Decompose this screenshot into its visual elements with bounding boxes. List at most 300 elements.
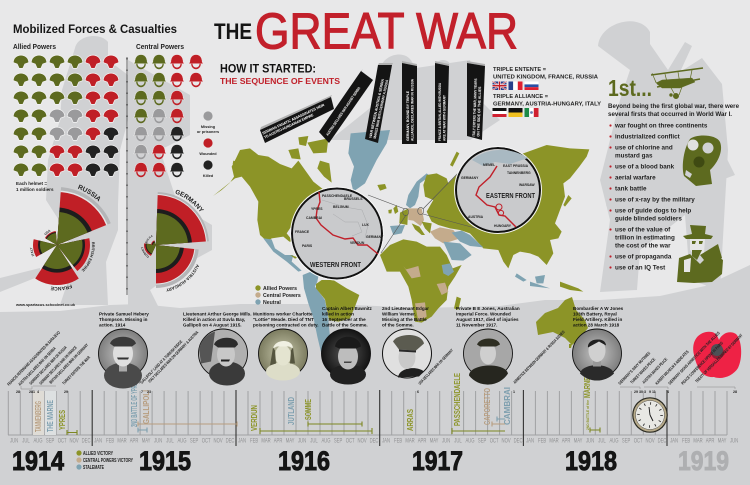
date ticks: 29	[64, 390, 68, 394]
arabia	[443, 242, 472, 261]
central powers helmets	[134, 44, 203, 177]
battles 1918	[583, 377, 600, 432]
firsts intro: Beyond being the first global war, there were	[608, 103, 739, 110]
portrait caption 4: killed in action	[322, 312, 354, 316]
australia	[536, 297, 588, 348]
portrait caption 6	[456, 306, 520, 328]
flag: italy	[524, 108, 538, 117]
battles 1916: JUTLAND	[287, 397, 296, 425]
month labels: AUG	[321, 438, 331, 445]
month labels: APR	[130, 438, 139, 445]
firsts list: war fought on three continents	[614, 122, 708, 130]
firsts list: use of a blood bank	[615, 164, 675, 170]
portrait 1	[98, 329, 148, 388]
central casualties rose chart: AUSTRIA-HUNGARY	[166, 264, 199, 292]
portrait 5	[382, 329, 432, 378]
casualty legend: or prisoners	[197, 130, 219, 134]
month labels: JUN	[154, 438, 162, 445]
flag: germany	[492, 108, 506, 117]
month labels: MAY	[142, 438, 151, 445]
portrait caption 5	[382, 306, 429, 328]
battles 1917: CAPORETTO	[483, 388, 492, 425]
portrait caption 5: 2nd Lieutenant Edgar	[382, 306, 429, 311]
timeline legend: ALLIED VICTORY	[83, 451, 113, 457]
events 1918: KAISER WILHELM II ABDICATES	[654, 349, 690, 386]
casualty legend: Missing	[201, 125, 216, 129]
month labels: JUL	[22, 438, 30, 445]
central powers europe	[408, 208, 424, 226]
western front inset: LUX	[362, 223, 370, 227]
month labels: SEP	[190, 438, 199, 445]
date ticks: 1	[513, 390, 515, 394]
icon: biplane	[651, 68, 703, 99]
eastern front inset: MEMEL	[483, 163, 495, 167]
eastern front inset: TANNENBERG	[507, 171, 531, 175]
month labels: MAY	[286, 438, 295, 445]
helmet scale note: 1 million soldiers	[16, 187, 54, 192]
month labels: OCT	[490, 438, 499, 445]
western front inset: YPRES	[311, 207, 323, 211]
domino: austria declares war: AUSTRIA DECLARES WAR AGAINST SERBIA	[326, 86, 361, 137]
triple entente and alliance	[492, 67, 601, 117]
month labels: JUN	[586, 438, 594, 445]
battles 1914: THE MARNE	[46, 400, 55, 432]
battles 1917: PASSCHENDAELE	[453, 373, 462, 426]
events 1919 over poppy: PEACE CONFERENCE OPENS IN PARIS	[680, 340, 724, 386]
events 1914	[6, 330, 91, 387]
firsts list: guide blinded soldiers	[615, 216, 682, 222]
month labels: NOV	[214, 438, 223, 445]
persia	[452, 231, 483, 247]
portrait caption 3: "Lottie" Meade. Died of TNT	[253, 317, 314, 322]
timeline legend: CENTRAL POWERS VICTORY	[83, 458, 133, 464]
month labels: AUG	[33, 438, 43, 445]
month labels: NOV	[358, 438, 367, 445]
western front inset: WESTERN FRONT	[310, 262, 362, 269]
ottoman empire	[430, 227, 460, 243]
month labels: JUL	[166, 438, 174, 445]
novaya zemlya	[450, 152, 459, 167]
date ticks: 29	[634, 390, 638, 394]
russia and asia	[423, 145, 589, 268]
month labels: JUN	[730, 438, 738, 445]
month labels: DEC	[82, 438, 91, 445]
month labels: DEC	[658, 438, 667, 445]
month labels: DEC	[226, 438, 235, 445]
flag: france	[508, 82, 522, 90]
portrait caption 4: 16 September at the	[322, 317, 366, 322]
month labels: SEP	[334, 438, 343, 445]
title: GREAT WAR	[255, 2, 518, 60]
japan	[563, 195, 572, 207]
month labels: JAN	[670, 438, 678, 445]
source url: www.spartacus.schoolnet.co.uk	[15, 302, 76, 307]
month labels: APR	[706, 438, 715, 445]
allied casualties rose chart: BRITISH EMPIRE	[82, 242, 95, 272]
year divider lines	[92, 390, 667, 446]
icon: pocket watch	[632, 397, 668, 433]
triple entente and alliance: UNITED KINGDOM, FRANCE, RUSSIA	[493, 74, 598, 80]
month labels: JAN	[94, 438, 102, 445]
month labels: JUL	[598, 438, 606, 445]
firsts list: aerial warfare	[615, 174, 656, 182]
ground band behind timeline	[0, 265, 750, 485]
central casualties rose chart: BULGARIA	[145, 235, 153, 244]
domino: italy: ITALY ENTERS THE WAR, MANY YEARS	[472, 78, 478, 137]
month labels: MAR	[261, 438, 271, 445]
date ticks: 30	[639, 390, 643, 394]
portrait 7	[572, 329, 622, 381]
western front inset	[290, 187, 384, 280]
greenland	[348, 130, 390, 192]
indonesia	[515, 273, 550, 288]
month labels: SEP	[46, 438, 55, 445]
portrait caption 7: Field Artillery. Killed in	[573, 317, 622, 322]
date ticks: 23	[147, 390, 151, 394]
battles 1916: SOMME	[304, 399, 313, 420]
events 1914: GERMANY DECLARES WAR ON FRANCE	[38, 345, 78, 386]
firsts list: the cost of the war	[615, 242, 671, 250]
battles 1918: 2ND BATTLE of the	[585, 399, 590, 430]
month labels: APR	[418, 438, 427, 445]
month labels: OCT	[202, 438, 211, 445]
domino: assassination	[260, 95, 334, 143]
battles 1915: GALLIPOLI	[142, 390, 151, 424]
portrait caption 6: 11 November 1917.	[456, 322, 497, 328]
firsts intro: several firsts that occurred in World War I.	[608, 111, 732, 118]
portrait caption 6: Imperial Force. Wounded	[456, 312, 511, 316]
eastern front inset: EAST PRUSSIA	[503, 164, 529, 168]
allied powers helmets	[13, 44, 119, 176]
events 1914: AUSTRIA DECLARES WAR ON SERBIA	[17, 346, 57, 387]
western front inset: GERMANY	[366, 235, 384, 239]
portrait caption 6: August 1917, died of injuries	[456, 317, 519, 322]
battles 1917: CAMBRAI	[503, 387, 512, 425]
events 1918	[512, 329, 690, 386]
western front inset: BELGIUM	[333, 205, 349, 209]
portrait caption 5: William Vermer.	[382, 312, 416, 316]
portrait caption 1	[99, 312, 149, 328]
month labels: JUL	[310, 438, 318, 445]
firsts list: use of the value of	[615, 226, 671, 234]
italy and balkans	[412, 222, 432, 235]
month labels: AUG	[609, 438, 619, 445]
month labels: MAR	[117, 438, 127, 445]
portrait 4	[322, 329, 370, 384]
world map	[213, 130, 589, 357]
africa central powers colonies	[403, 266, 448, 322]
africa	[380, 239, 462, 323]
domino: france and britain	[435, 61, 449, 143]
firsts list: industrialized conflict	[615, 134, 681, 140]
events 1915: "GALLIPOLI" LAND AT A TURKISH RIDGE	[138, 339, 184, 386]
month labels: MAR	[693, 438, 703, 445]
central casualties rose chart: GERMANY	[176, 190, 204, 212]
month labels: MAR	[549, 438, 559, 445]
portrait 2	[198, 329, 248, 386]
iceland	[377, 184, 387, 191]
date ticks: 28	[16, 390, 20, 394]
domino: assassination: SERBIAN FANATIC ASSASSINATES HEIR	[262, 103, 325, 136]
date ticks: 28	[29, 390, 33, 394]
month labels: FEB	[394, 438, 403, 445]
month labels: MAY	[574, 438, 583, 445]
firsts list: tank battle	[615, 186, 647, 192]
portrait caption 7: action 28 March 1918	[573, 322, 620, 328]
events 1914: TURKEY ENTERS THE WAR	[61, 355, 91, 386]
triple entente and alliance: GERMANY, AUSTRIA-HUNGARY, ITALY	[493, 102, 601, 108]
month labels: APR	[562, 438, 571, 445]
domino: france and britain: ARE AT WAR WITH GERMANY	[442, 95, 446, 141]
firsts list: use of chlorine and	[615, 144, 673, 152]
month labels: FEB	[250, 438, 259, 445]
new guinea	[560, 282, 583, 292]
portrait caption 2: Killed in action at Suvla Bay,	[183, 317, 245, 322]
portrait caption 5: of the Somme.	[382, 322, 414, 328]
month labels: NOV	[502, 438, 511, 445]
eastern front inset: AUSTRIA	[468, 215, 484, 219]
portrait caption 7: 103th Battery, Royal	[573, 312, 617, 316]
events 1915: ITALY DECLARES WAR ON GERMANY & AUSTRIA	[147, 330, 199, 384]
brazil	[316, 280, 359, 322]
portrait caption 4: Captain Albert Bawnitz	[322, 306, 373, 311]
western front inset: BRUSSELS	[344, 197, 363, 201]
scandinavia	[406, 173, 430, 208]
map legend: Central Powers	[263, 293, 301, 299]
sequence of events heading: THE SEQUENCE OF EVENTS	[220, 77, 341, 86]
south america neutral	[303, 271, 330, 357]
battles 1917	[406, 373, 512, 434]
eastern front inset	[454, 146, 542, 234]
domino: germany declares war	[402, 61, 417, 144]
month labels: JUN	[298, 438, 306, 445]
map legend: Neutral	[263, 300, 281, 306]
month labels	[10, 438, 738, 445]
portrait caption 7	[573, 306, 624, 328]
events 1914: GERMANY DECLARES WAR ON RUSSIA	[28, 345, 68, 386]
events 1918: ARMISTICE BETWEEN GERMANY & RUSSIA SIGNED	[512, 329, 566, 385]
month labels: MAY	[430, 438, 439, 445]
events 1918: AUSTRIA MAKES PEACE	[641, 357, 668, 385]
date ticks: 4	[37, 390, 39, 394]
month labels: JAN	[382, 438, 390, 445]
timeline legend	[76, 450, 133, 471]
domino: russia mobilises	[365, 63, 393, 143]
domino: germany declares war: GERMANY, BOUND BY TRIPLE	[406, 91, 410, 141]
portrait caption 5: Missing at the Battle	[382, 317, 427, 322]
portrait caption 2: Lieutenant Arthur George Mills.	[183, 312, 252, 316]
month labels: JUL	[454, 438, 462, 445]
firsts list	[609, 122, 708, 272]
firsts heading: 1st...	[608, 75, 652, 101]
date ticks: 6	[417, 390, 419, 394]
year labels: 1916	[278, 446, 330, 476]
icon: poppy	[693, 332, 741, 378]
portrait caption 2: Gallipoli on 4 August 1915.	[183, 322, 242, 328]
portrait caption 2	[183, 312, 252, 328]
western europe	[388, 205, 408, 225]
month labels: OCT	[346, 438, 355, 445]
portrait caption 4: Battle of the Somme.	[322, 322, 368, 328]
flag: uk	[492, 82, 506, 90]
firsts list: use of guide dogs to help	[615, 208, 691, 214]
domino: assassination: TO AUSTRO-HUNGARIAN EMPIRE	[264, 113, 315, 139]
allied casualties rose chart	[30, 184, 110, 290]
portrait caption 6: Private B E Jones, Australian	[456, 306, 520, 311]
casualty legend	[197, 111, 219, 178]
date ticks: 9	[649, 390, 651, 394]
domino: germany declares war: ALLIANCE, DECLARES WAR IN RUSSIA	[410, 79, 414, 141]
date ticks: 28	[733, 390, 737, 394]
month labels: NOV	[70, 438, 79, 445]
month labels: OCT	[58, 438, 67, 445]
year labels: 1918	[565, 446, 617, 476]
portrait caption 3	[253, 312, 319, 328]
battles 1918: MARNE	[583, 377, 592, 398]
timeline legend: STALEMATE	[83, 465, 104, 471]
triple entente and alliance: TRIPLE ALLIANCE =	[493, 94, 549, 100]
map legend	[255, 285, 301, 306]
portrait caption 4	[322, 306, 373, 328]
battles 1916: VERDUN	[250, 405, 259, 431]
battles 1914: TANNENBERG	[34, 401, 43, 432]
firsts list: trillion in estimating	[615, 234, 675, 242]
allied powers helmets: Allied Powers	[13, 44, 56, 51]
year labels: 1915	[139, 446, 191, 476]
portrait caption 1: Thompson. Missing in	[99, 317, 148, 322]
sequence of events heading	[220, 64, 341, 86]
firsts list: use of an IQ Test	[615, 264, 666, 272]
arctic islands	[233, 136, 332, 183]
domino: france and britain: FRANCE & BRITAIN, ALLIED WITH RUSSIA	[438, 83, 442, 141]
flag: austria-hungary	[508, 108, 522, 117]
domino: russia mobilises: MAKES WAR WITH GERMANY A RUSSIA	[373, 79, 389, 139]
north america	[213, 148, 324, 242]
events 1919 over poppy: GERMANY SIGNS ARMISTICE WITH THE ALLIES	[667, 330, 721, 386]
month labels: FEB	[538, 438, 547, 445]
madagascar	[454, 297, 461, 310]
firsts list: use of x-ray by the military	[615, 196, 695, 204]
triple entente and alliance: TRIPLE ENTENTE =	[493, 67, 547, 73]
portrait 6	[464, 329, 512, 385]
portrait 3	[258, 329, 308, 380]
battles 1914	[33, 391, 77, 435]
western front inset: CAMBRAI	[306, 216, 322, 220]
year labels: 1917	[412, 446, 463, 476]
month labels: FEB	[682, 438, 691, 445]
battles 1917: ARRAS	[406, 408, 415, 431]
battles 1915	[130, 380, 237, 432]
central powers helmets: Central Powers	[136, 44, 184, 51]
firsts list: use of propaganda	[615, 254, 672, 260]
date ticks: 1	[33, 390, 35, 394]
central casualties rose chart	[141, 190, 209, 292]
western front inset: VERDUN	[350, 241, 365, 245]
month labels: AUG	[177, 438, 187, 445]
mexico and central america	[263, 238, 302, 272]
eastern front inset: HUNGARY	[494, 224, 512, 228]
battles 1915: 2ND BATTLE OF YPRES	[130, 380, 139, 427]
allied casualties rose chart: FRANCE	[50, 284, 72, 290]
background soldier silhouettes	[0, 21, 735, 310]
eastern front inset: EASTERN FRONT	[486, 193, 536, 200]
timeline gridlines	[8, 391, 727, 435]
icon: uncle sam	[677, 225, 723, 283]
connector lines to front maps	[368, 171, 475, 253]
portrait caption 1: Private Samuel Hebery	[99, 312, 149, 316]
section heading: mobilized forces: Mobilized Forces & Casualties	[13, 22, 177, 36]
date ticks: 4	[667, 390, 669, 394]
central casualties rose chart: TURKEY	[141, 247, 149, 258]
month labels: APR	[274, 438, 283, 445]
iberia	[390, 225, 405, 235]
helmet scale note: Each helmet =	[16, 181, 47, 186]
month labels: JAN	[238, 438, 246, 445]
month labels: JAN	[526, 438, 534, 445]
firsts intro	[608, 103, 739, 118]
eastern front inset: GERMANY	[461, 176, 479, 180]
events 1918: TURKEY MAKES PEACE	[629, 357, 656, 385]
year labels: 1919	[678, 446, 729, 476]
flag: russia	[524, 82, 538, 90]
casualty legend: Killed	[203, 174, 214, 178]
icon: gas mask	[683, 136, 721, 186]
month labels: OCT	[634, 438, 643, 445]
month labels: JUN	[10, 438, 18, 445]
month labels: NOV	[646, 438, 655, 445]
allied casualties rose chart: USA	[44, 230, 51, 235]
portrait caption 3: Munitions worker Charlotte	[253, 312, 313, 316]
event brackets	[21, 386, 735, 389]
portrait caption 1: action. 1914	[99, 322, 126, 328]
helmet scale note	[16, 181, 54, 192]
month labels: SEP	[622, 438, 631, 445]
events 1914: FRANCIS FERDINAND ASSASSINATED IN SARAJEVO	[6, 330, 61, 387]
battles 1916	[250, 397, 372, 434]
portrait caption 3: poisoning contracted on duty.	[253, 322, 319, 328]
year labels	[12, 446, 729, 476]
month labels: FEB	[106, 438, 115, 445]
firsts list: mustard gas	[615, 152, 653, 160]
domino: italy	[467, 61, 485, 140]
date ticks: 7	[141, 390, 143, 394]
month labels: JUN	[442, 438, 450, 445]
events 1914: BRITAIN DECLARES WAR ON GERMANY	[48, 342, 89, 385]
barbed wire divider	[126, 57, 128, 295]
western front inset: PARIS	[302, 244, 313, 248]
year labels: 1914	[12, 446, 64, 476]
events 1918: GERMANY'S NAVY MUTINIES	[617, 350, 651, 386]
battles 1914: YPRES	[58, 410, 67, 430]
month labels: SEP	[478, 438, 487, 445]
western front inset: PASSCHENDAELE	[322, 194, 353, 198]
sequence of events heading: HOW IT STARTED:	[220, 64, 316, 76]
month labels: MAR	[405, 438, 415, 445]
month labels: DEC	[370, 438, 379, 445]
map legend: Allied Powers	[263, 286, 297, 292]
month labels: MAY	[718, 438, 727, 445]
domino: russia mobilises: WAR BETWEEN AUSTRIA & SERBIA	[369, 78, 385, 138]
casualty legend: Wounded	[199, 152, 217, 156]
allied casualties rose chart: ITALY	[30, 248, 34, 256]
date ticks: 3	[644, 390, 646, 394]
portrait caption 7: Bombardier A W Jones	[573, 306, 624, 311]
caribbean	[290, 255, 298, 259]
eastern front inset: WARSAW	[519, 183, 535, 187]
allied casualties rose chart: RUSSIA	[78, 184, 100, 202]
title: THE	[214, 19, 252, 44]
date ticks: 11	[652, 390, 656, 394]
